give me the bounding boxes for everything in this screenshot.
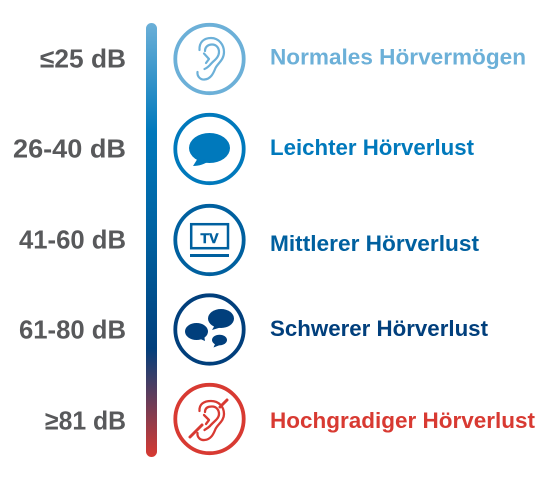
row: severe hearing loss [19,295,489,364]
label: 41-60 dB: 41-60 dB [19,224,126,254]
gradient scale bar [146,23,157,457]
icon: television [175,206,244,274]
row: moderate hearing loss [19,206,480,274]
label: 26-40 dB: 26-40 dB [13,134,126,164]
label: Hochgradiger Hörverlust: Hochgradiger Hörverlust [270,408,536,433]
icon: crossed-out ear [175,385,244,453]
icon: ear [175,25,244,93]
label: Leichter Hörverlust: Leichter Hörverlust [270,135,475,160]
icon: television: TV [201,230,219,246]
icon: three speech bubbles [175,295,244,364]
label: 61-80 dB: 61-80 dB [19,314,126,344]
row: profound hearing loss [45,385,536,453]
label: Mittlerer Hörverlust: Mittlerer Hörverlust [270,231,480,256]
row: mild hearing loss [13,115,475,183]
label: 81 dB: ≥81 dB [45,406,126,436]
icon: speech bubble [175,115,244,183]
label: Schwerer Hörverlust: Schwerer Hörverlust [270,316,489,341]
label: Normales Hörvermögen: Normales Hörvermögen [270,44,526,70]
label: 25 dB: ≤25 dB [40,44,126,74]
row: normal hearing [40,25,526,93]
